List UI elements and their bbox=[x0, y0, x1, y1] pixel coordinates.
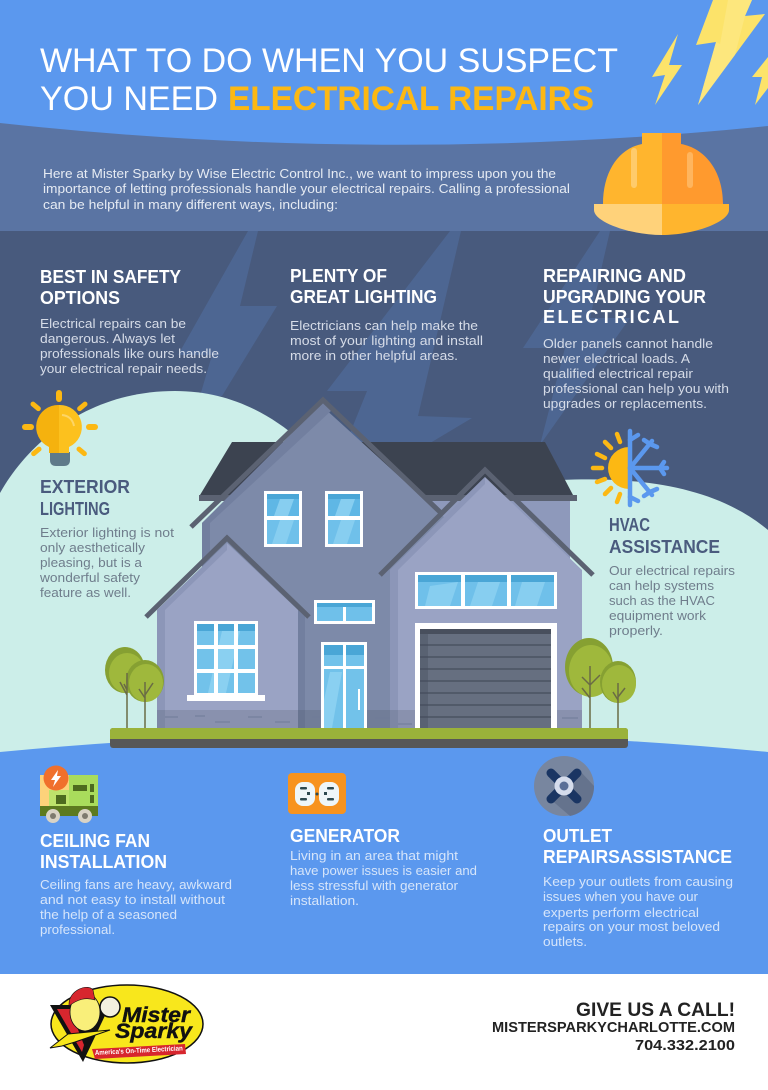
panel: repairing and upgrading: upgrades or replacements. bbox=[543, 396, 707, 411]
logo: mister sparky bbox=[50, 985, 203, 1063]
intro band bbox=[0, 118, 768, 231]
panel: exterior lighting: only aesthetically bbox=[40, 540, 146, 555]
house illustration bbox=[146, 400, 593, 728]
panel: repairing and upgrading bbox=[543, 266, 729, 411]
icon: outlet bbox=[288, 773, 346, 814]
panel: repairing and upgrading: REPAIRING AND bbox=[543, 266, 686, 286]
panel: best in safety: dangerous. Always let bbox=[40, 331, 175, 346]
icon: light bulb bbox=[22, 390, 98, 466]
panel: ceiling fan installation: CEILING FAN bbox=[40, 831, 150, 851]
dark background section bbox=[0, 231, 768, 761]
panel: plenty of great lighting: Electricians can help make the bbox=[290, 318, 478, 333]
panel: hvac assistance: ASSISTANCE bbox=[609, 537, 720, 557]
panel: plenty of great lighting: most of your lighting and install bbox=[290, 333, 483, 348]
icon: hard hat bbox=[594, 133, 729, 235]
panel: generator: GENERATOR bbox=[290, 826, 400, 846]
panel: best in safety: professionals like ours handle bbox=[40, 346, 219, 361]
panel: exterior lighting: wonderful safety bbox=[39, 570, 141, 585]
panel: ceiling fan installation: INSTALLATION bbox=[40, 852, 167, 872]
contact details: GIVE US A CALL! bbox=[576, 1000, 735, 1021]
contact details bbox=[492, 1000, 735, 1054]
panel: repairing and upgrading: professional can help you with bbox=[543, 381, 729, 396]
intro text: Here at Mister Sparky by Wise Electric Control Inc., we want to impress upon you the bbox=[43, 166, 556, 181]
title bbox=[40, 42, 618, 118]
panel: hvac assistance: such as the HVAC bbox=[609, 593, 715, 608]
intro text: importance of letting professionals handle your electrical repairs. Calling a professional bbox=[43, 181, 570, 196]
hill: left mint bbox=[0, 391, 300, 770]
panel: exterior lighting: pleasing, but is a bbox=[40, 555, 143, 570]
panel: generator: have power issues is easier and bbox=[290, 863, 477, 878]
panel: repairing and upgrading: newer electrical loads. A bbox=[543, 351, 690, 366]
trees: right bbox=[565, 638, 636, 728]
panel: best in safety: OPTIONS bbox=[40, 288, 120, 308]
panel: hvac assistance: Our electrical repairs bbox=[609, 563, 736, 578]
front door bbox=[321, 642, 367, 728]
panel: ceiling fan installation bbox=[40, 831, 232, 937]
window: above garage bbox=[415, 572, 557, 609]
panel: outlet repairs assistance: issues when you have our bbox=[543, 889, 699, 904]
stone base bbox=[157, 710, 582, 728]
panel: hvac assistance: can help systems bbox=[609, 578, 715, 593]
icon: lightning bolts bbox=[652, 0, 768, 105]
panel: hvac assistance: properly. bbox=[609, 623, 663, 638]
panel: outlet repairs assistance: experts perform electrical bbox=[543, 905, 699, 920]
window: small centre bbox=[314, 600, 375, 624]
panel: exterior lighting: EXTERIOR bbox=[40, 477, 130, 497]
panel: exterior lighting: LIGHTING bbox=[40, 499, 110, 519]
panel: best in safety: Electrical repairs can be bbox=[40, 316, 186, 331]
panel: exterior lighting bbox=[39, 477, 174, 600]
panel: outlet repairs assistance: Keep your outlets from causing bbox=[543, 874, 733, 889]
hill: right mint bbox=[560, 479, 768, 770]
logo: mister sparky: America's On-Time Electrician bbox=[95, 1045, 183, 1057]
contact details: MISTERSPARKYCHARLOTTE.COM bbox=[492, 1019, 735, 1036]
panel: outlet repairs assistance: REPAIRSASSISTANCE bbox=[543, 847, 732, 867]
panel: generator bbox=[290, 826, 477, 908]
contact details: 704.332.2100 bbox=[635, 1037, 735, 1054]
panel: best in safety: BEST IN SAFETY bbox=[40, 267, 181, 287]
panel: hvac assistance: equipment work bbox=[609, 608, 707, 623]
panel: plenty of great lighting: PLENTY OF bbox=[290, 266, 387, 286]
panel: best in safety bbox=[40, 267, 219, 376]
title: YOU NEED bbox=[40, 80, 218, 118]
logo: mister sparky: Sparky bbox=[115, 1020, 193, 1043]
icon: generator bbox=[40, 766, 98, 823]
panel: outlet repairs assistance: OUTLET bbox=[543, 826, 612, 846]
panel: exterior lighting: feature as well. bbox=[40, 585, 131, 600]
panel: hvac assistance bbox=[609, 515, 736, 638]
panel: ceiling fan installation: and not easy to install without bbox=[40, 892, 225, 907]
panel: best in safety: your electrical repair needs. bbox=[40, 361, 207, 376]
panel: ceiling fan installation: Ceiling fans are heavy, awkward bbox=[40, 877, 232, 892]
panel: outlet repairs assistance: outlets. bbox=[543, 934, 587, 949]
icon: ceiling fan bbox=[534, 756, 594, 816]
panel: plenty of great lighting: GREAT LIGHTING bbox=[290, 287, 437, 307]
panel: repairing and upgrading: Older panels cannot handle bbox=[543, 336, 713, 351]
panel: repairing and upgrading: UPGRADING YOUR bbox=[543, 287, 706, 307]
panel: ceiling fan installation: professional. bbox=[40, 922, 115, 937]
window: upper right bbox=[325, 491, 363, 547]
panel: generator: installation. bbox=[290, 893, 359, 908]
trees: left bbox=[105, 647, 164, 728]
window: lower left bbox=[187, 621, 265, 701]
panel: plenty of great lighting bbox=[290, 266, 483, 363]
panel: exterior lighting: Exterior lighting is not bbox=[40, 525, 174, 540]
title: WHAT TO DO WHEN YOU SUSPECT bbox=[40, 42, 618, 80]
header background bbox=[0, 0, 768, 145]
window: upper left bbox=[264, 491, 302, 547]
icon: hvac sun and snowflake bbox=[593, 431, 667, 505]
panel: generator: Living in an area that might bbox=[290, 848, 458, 863]
panel: hvac assistance: HVAC bbox=[609, 515, 650, 535]
footer blue section bbox=[0, 734, 768, 974]
logo: mister sparky: Mister bbox=[122, 1004, 192, 1027]
panel: outlet repairs assistance: repairs on your most beloved bbox=[543, 919, 720, 934]
panel: repairing and upgrading: qualified electrical repair bbox=[543, 366, 694, 381]
panel: ceiling fan installation: the help of a seasoned bbox=[40, 907, 177, 922]
panel: outlet repairs assistance bbox=[543, 826, 733, 949]
title: ELECTRICAL REPAIRS bbox=[228, 80, 594, 118]
intro text bbox=[43, 166, 570, 212]
ground strip bbox=[110, 728, 628, 748]
panel: generator: less stressful with generator bbox=[290, 878, 459, 893]
garage door bbox=[415, 623, 557, 728]
panel: plenty of great lighting: more in other helpful areas. bbox=[290, 348, 458, 363]
intro text: can be helpful in many different ways, including: bbox=[43, 197, 338, 212]
panel: repairing and upgrading: ELECTRICAL bbox=[543, 307, 679, 327]
